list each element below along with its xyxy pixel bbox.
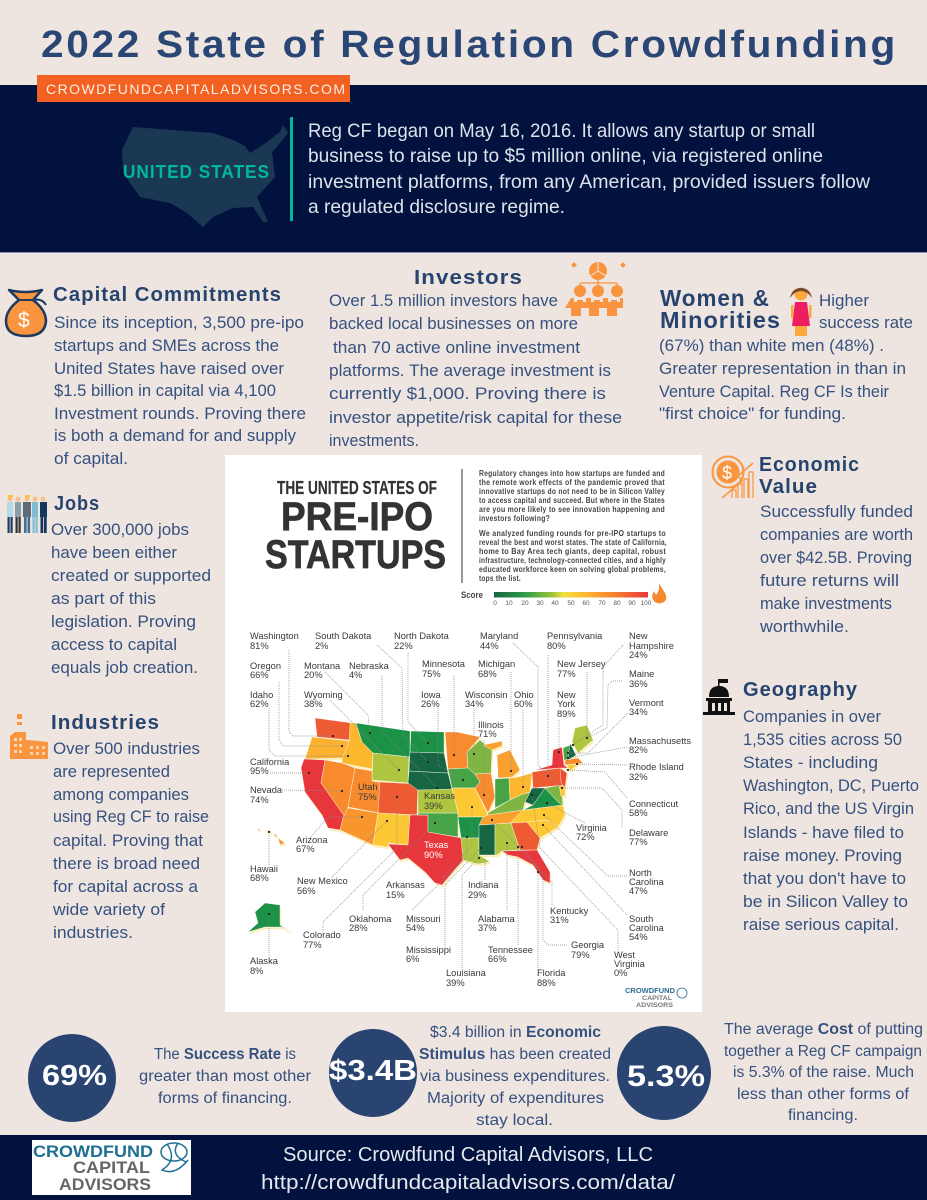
map state labels: York [557, 699, 576, 709]
map state labels: Pennsylvania [547, 631, 603, 641]
map state labels: Wisconsin [465, 690, 507, 700]
map state labels: Minnesota [422, 659, 466, 669]
intro text: a regulated disclosure regime. [308, 196, 565, 218]
text: United States have raised over [54, 359, 284, 378]
footer logo: CROWDFUND [33, 1142, 153, 1161]
map state labels: 66% [250, 670, 269, 680]
map state labels: 0% [614, 968, 627, 978]
map state labels: North Dakota [394, 631, 450, 641]
map state labels: 31% [550, 915, 569, 925]
text: investor appetite/risk capital for these [329, 408, 622, 427]
map state labels: 20% [304, 670, 323, 680]
map logo: ADVISORS [636, 1002, 674, 1009]
map state labels: 82% [629, 745, 648, 755]
text: of capital. [54, 449, 128, 468]
map intro text: to access capital and succeed. But where in the States [479, 496, 665, 505]
stat text: via business expenditures. [420, 1068, 610, 1085]
map state labels: Oregon [250, 661, 281, 671]
text: "first choice" for funding. [659, 404, 846, 423]
map intro text: Regulatory changes into how startups are funded and [479, 469, 665, 478]
stat text [724, 1021, 923, 1124]
text [54, 313, 306, 468]
map state labels: 39% [446, 978, 465, 988]
map state labels: Oklahoma [349, 914, 392, 924]
map state labels: 32% [629, 772, 648, 782]
map state labels: 24% [629, 650, 648, 660]
map heading: PRE-IPO [281, 495, 433, 539]
map state labels: Texas [424, 840, 449, 850]
text: Over 300,000 jobs [51, 520, 189, 539]
map state labels: 77% [629, 837, 648, 847]
map state labels: 89% [557, 709, 576, 719]
footer logo: CAPITAL [73, 1158, 150, 1177]
text: using Reg CF to raise [53, 807, 209, 826]
panel: investors [329, 262, 626, 450]
map state labels: Wyoming [304, 690, 343, 700]
text: legislation. Proving [51, 612, 196, 631]
text: future returns will [760, 571, 899, 590]
map state labels: Alaska [250, 956, 279, 966]
text: Over 1.5 million investors have [329, 291, 558, 310]
heading [660, 285, 781, 333]
map state labels: 54% [406, 923, 425, 933]
icon: flame [652, 583, 666, 604]
map state labels: 36% [629, 679, 648, 689]
map state labels: Arkansas [386, 880, 425, 890]
map state labels [250, 631, 691, 988]
score legend: 90 [628, 600, 636, 607]
map state labels: South Dakota [315, 631, 372, 641]
map state labels: Washington [250, 631, 299, 641]
map state labels: California [250, 757, 290, 767]
map state labels: Maine [629, 669, 654, 679]
map state labels: 44% [480, 641, 499, 651]
panel: intro banner [0, 75, 927, 253]
map state labels: 34% [629, 707, 648, 717]
stat: success rate [28, 1034, 311, 1122]
panel: industries [10, 712, 209, 942]
map state labels: 54% [629, 932, 648, 942]
heading: Investors [414, 267, 523, 289]
map leader lines [269, 643, 628, 970]
text: there is broad need [53, 854, 200, 873]
stat text [419, 1024, 611, 1129]
text: equals job creation. [51, 658, 198, 677]
map intro text: tops the list. [479, 574, 521, 583]
panel: footer [0, 1135, 927, 1200]
map intro text: home to Bay Area tech giants, deep capital, robust [479, 547, 666, 556]
text: Rico, and the US Virgin [743, 799, 914, 818]
stat text: Stimulus has been created [419, 1046, 611, 1063]
text: Over 500 industries [53, 739, 200, 758]
intro text [308, 120, 871, 218]
map state labels: Hawaii [250, 864, 278, 874]
text: among companies [53, 785, 189, 804]
map intro text: the remote work effects of the pandemic proved that [479, 478, 665, 487]
map state labels: Virginia [576, 823, 608, 833]
text [52, 739, 209, 942]
text [329, 291, 622, 450]
map logo [625, 988, 687, 1009]
heading: Geography [743, 679, 858, 701]
map state labels: 60% [514, 699, 533, 709]
stat: economic stimulus [329, 1024, 611, 1129]
map state labels: 28% [349, 923, 368, 933]
text: access to capital [51, 635, 177, 654]
icon: factory [10, 714, 48, 759]
map state labels: 66% [488, 954, 507, 964]
heading: Industries [51, 712, 160, 734]
stat: average cost [617, 1021, 923, 1124]
score legend: 0 [493, 600, 497, 607]
text [659, 291, 913, 423]
map state labels: 77% [303, 940, 322, 950]
heading: Women & [660, 285, 770, 311]
stat text: together a Reg CF campaign [724, 1043, 922, 1060]
score legend: 100 [641, 600, 652, 607]
text: over $42.5B. Proving [760, 548, 912, 567]
icon: US silhouette: UNITED STATES [123, 162, 270, 182]
map state labels: New Jersey [557, 659, 606, 669]
map state labels: 88% [537, 978, 556, 988]
map state labels: 47% [629, 886, 648, 896]
map state labels: 38% [304, 699, 323, 709]
map state labels: 8% [250, 966, 263, 976]
text: capital. Proving that [53, 831, 203, 850]
icon: girl [790, 288, 812, 336]
icon: money bag [6, 290, 46, 336]
map state labels: Nevada [250, 785, 283, 795]
map intro text: investors following? [479, 514, 550, 523]
score legend: 60 [582, 600, 590, 607]
text: Higher [819, 291, 869, 310]
icon: globe [161, 1143, 188, 1172]
map state labels: 56% [297, 886, 316, 896]
stat text: stay local. [476, 1112, 553, 1129]
panel: geography [703, 679, 919, 934]
text: platforms. The average investment is [329, 361, 611, 380]
text: Islands - have filed to [743, 823, 904, 842]
stat text: financing. [788, 1107, 858, 1124]
map state labels: Missouri [406, 914, 441, 924]
footer logo [32, 1140, 191, 1195]
map state labels: Indiana [468, 880, 499, 890]
map state labels: 75% [422, 669, 441, 679]
text: Successfully funded [760, 502, 913, 521]
map state labels: Nebraska [349, 661, 390, 671]
icon: coin and growth chart: $ [722, 463, 732, 483]
map state labels: 90% [424, 850, 443, 860]
map state labels: 81% [250, 641, 269, 651]
intro text: business to raise up to $5 million online, via registered online [308, 145, 823, 167]
text: is both a demand for and supply [54, 426, 296, 445]
text: for capital across a [53, 877, 199, 896]
text: backed local businesses on more [329, 314, 578, 333]
icon: workers [7, 495, 47, 533]
map heading: STARTUPS [265, 533, 446, 577]
map state labels: Iowa [421, 690, 441, 700]
text [743, 707, 919, 934]
map state labels: 62% [250, 699, 269, 709]
map state labels: Virginia [614, 959, 646, 969]
map state labels: 72% [576, 832, 595, 842]
map state labels: North [629, 868, 652, 878]
stat: average cost: 5.3% [627, 1060, 705, 1093]
icon: US silhouette [122, 125, 288, 227]
text [51, 520, 211, 677]
text: Since its inception, 3,500 pre-ipo [54, 313, 304, 332]
stat: success rate: 69% [42, 1060, 107, 1092]
score legend: 80 [613, 600, 621, 607]
stat text: less than other forms of [737, 1086, 910, 1103]
stat text: The average Cost of putting [724, 1021, 923, 1038]
map state labels: South [629, 914, 653, 924]
score legend: 20 [521, 600, 529, 607]
text: than 70 active online investment [333, 338, 580, 357]
footer logo: ADVISORS [59, 1175, 151, 1194]
map state labels: 58% [629, 808, 648, 818]
map logo: CROWDFUND [625, 988, 675, 995]
icon: coin and growth chart [712, 456, 753, 498]
text: raise serious capital. [743, 915, 899, 934]
heading: Economic [759, 454, 860, 476]
text: success rate [819, 313, 913, 332]
map state labels: Illinois [478, 720, 504, 730]
map intro text: We analyzed funding rounds for pre-IPO startups to [479, 529, 666, 538]
map state labels: 75% [358, 792, 377, 802]
website tag [37, 75, 350, 102]
text: States - including [743, 753, 878, 772]
map intro text: are you more likely to see innovation happening and [479, 505, 665, 514]
map state labels: Georgia [571, 940, 605, 950]
intro text: investment platforms, from any American, provided issuers follow [308, 171, 871, 193]
map state labels: Delaware [629, 828, 668, 838]
map state labels: Arizona [296, 835, 328, 845]
map state labels: Idaho [250, 690, 273, 700]
stat: economic stimulus: $3.4B [329, 1055, 417, 1087]
score legend: 30 [536, 600, 544, 607]
map state labels: Colorado [303, 930, 341, 940]
stat text: The Success Rate is [154, 1046, 296, 1063]
panel: economic value: Value [759, 476, 818, 498]
map state labels: 80% [547, 641, 566, 651]
stat text [139, 1046, 311, 1107]
map state labels: 39% [424, 801, 443, 811]
map state labels: Kentucky [550, 906, 589, 916]
source text [261, 1144, 675, 1194]
map intro text: infrastructure, technology-connected cities, and a highly [479, 556, 666, 565]
map state labels: West [614, 950, 635, 960]
text: Venture Capital. Reg CF Is their [659, 382, 889, 401]
text: Washington, DC, Puerto [743, 776, 919, 795]
text: wide variety of [52, 900, 165, 919]
map state labels: Carolina [629, 923, 664, 933]
text: worthwhile. [759, 617, 849, 636]
icon: investors [565, 262, 626, 316]
map heading [265, 478, 446, 577]
source text: Source: Crowdfund Capital Advisors, LLC [283, 1144, 653, 1166]
map state labels: 68% [250, 873, 269, 883]
map state labels: 15% [386, 890, 405, 900]
map state labels: 34% [465, 699, 484, 709]
score legend: Score [461, 590, 483, 600]
map state labels: Tennessee [488, 945, 533, 955]
intro text: Reg CF began on May 16, 2016. It allows any startup or small [308, 120, 815, 142]
map intro text: reveal the best and worst states. The state of California, [479, 538, 667, 547]
text: currently $1,000. Proving there is [329, 384, 606, 403]
map state labels: 71% [478, 729, 497, 739]
text: have been either [51, 543, 177, 562]
panel: pre-IPO startups map [225, 455, 702, 1012]
website tag: CROWDFUNDCAPITALADVISORS.COM [46, 81, 345, 97]
stat text: is 5.3% of the raise. Much [733, 1064, 914, 1081]
map state labels: Mississippi [406, 945, 451, 955]
map intro text: innovative startups do not need to be in Silicon Valley [479, 487, 665, 496]
map state labels: 26% [421, 699, 440, 709]
text: be in Silicon Valley to [743, 892, 908, 911]
map state labels: 29% [468, 890, 487, 900]
map state labels: Utah [358, 782, 378, 792]
score legend: 40 [551, 600, 559, 607]
text: are represented [53, 762, 170, 781]
map state labels: New [629, 631, 648, 641]
heading: Jobs [54, 493, 100, 515]
map state labels: New Mexico [297, 876, 348, 886]
panel: capital commitments [6, 284, 306, 468]
map intro text: educated workforce keen on solving global problems, [479, 565, 666, 574]
text: raise money. Proving [743, 846, 902, 865]
icon: money bag: $ [18, 309, 30, 332]
map state labels: Vermont [629, 698, 664, 708]
map state labels: New [557, 690, 576, 700]
map state labels: 4% [349, 670, 362, 680]
map state labels: 77% [557, 669, 576, 679]
panel: jobs [7, 493, 211, 677]
map intro text [479, 469, 667, 583]
map state labels: Florida [537, 968, 566, 978]
panel: economic value [712, 454, 913, 636]
map state labels: 67% [296, 844, 315, 854]
stat text: $3.4 billion in Economic [430, 1024, 601, 1041]
text: as part of this [51, 589, 156, 608]
map state labels: 37% [478, 923, 497, 933]
source text: http://crowdfundcapitaladvisors.com/data/ [261, 1172, 675, 1194]
map state labels: Montana [304, 661, 341, 671]
panel: women and minorities [659, 285, 913, 423]
map state labels: 68% [478, 669, 497, 679]
map state labels: Hampshire [629, 641, 674, 651]
map state labels: 6% [406, 954, 419, 964]
score legend: 10 [505, 600, 513, 607]
text [759, 502, 913, 636]
heading: Minorities [660, 307, 781, 333]
stat text: Majority of expenditures [427, 1090, 604, 1107]
text: investments. [329, 431, 419, 450]
map state labels: Carolina [629, 877, 664, 887]
text: Greater representation in than in [659, 359, 906, 378]
map state labels: 2% [315, 641, 328, 651]
text: created or supported [51, 566, 211, 585]
map state labels: Louisiana [446, 968, 487, 978]
text: that you don't have to [743, 869, 906, 888]
map state labels: Connecticut [629, 799, 679, 809]
text: startups and SMEs across the [54, 336, 279, 355]
score legend: 50 [567, 600, 575, 607]
text: make investments [760, 594, 892, 613]
map state labels: Massachusetts [629, 736, 691, 746]
title: 2022 State of Regulation Crowdfunding [41, 24, 898, 66]
US choropleth map [248, 718, 593, 933]
map state labels: 95% [250, 766, 269, 776]
score legend: 70 [598, 600, 606, 607]
map heading: THE UNITED STATES OF [277, 478, 437, 498]
map state labels: Maryland [480, 631, 518, 641]
text: companies are worth [760, 525, 913, 544]
map state labels: 22% [394, 641, 413, 651]
icon: capitol [703, 679, 735, 715]
text: (67%) than white men (48%) . [659, 336, 884, 355]
map state labels: Rhode Island [629, 762, 684, 772]
map state dots [268, 732, 588, 915]
stat text: forms of financing. [158, 1090, 292, 1107]
text: Companies in over [743, 707, 881, 726]
text: Investment rounds. Proving there [54, 404, 306, 423]
map state labels: Kansas [424, 791, 455, 801]
map state labels: Ohio [514, 690, 534, 700]
stat text: greater than most other [139, 1068, 311, 1085]
text: 1,535 cities across 50 [743, 730, 902, 749]
map state labels: Michigan [478, 659, 515, 669]
score legend [461, 583, 666, 607]
heading: Capital Commitments [53, 284, 282, 306]
text: $1.5 billion in capital via 4,100 [54, 381, 276, 400]
text: industries. [53, 923, 133, 942]
map state labels: 79% [571, 950, 590, 960]
map state labels: 74% [250, 795, 269, 805]
map logo: CAPITAL [642, 995, 672, 1002]
map state labels: Alabama [478, 914, 516, 924]
